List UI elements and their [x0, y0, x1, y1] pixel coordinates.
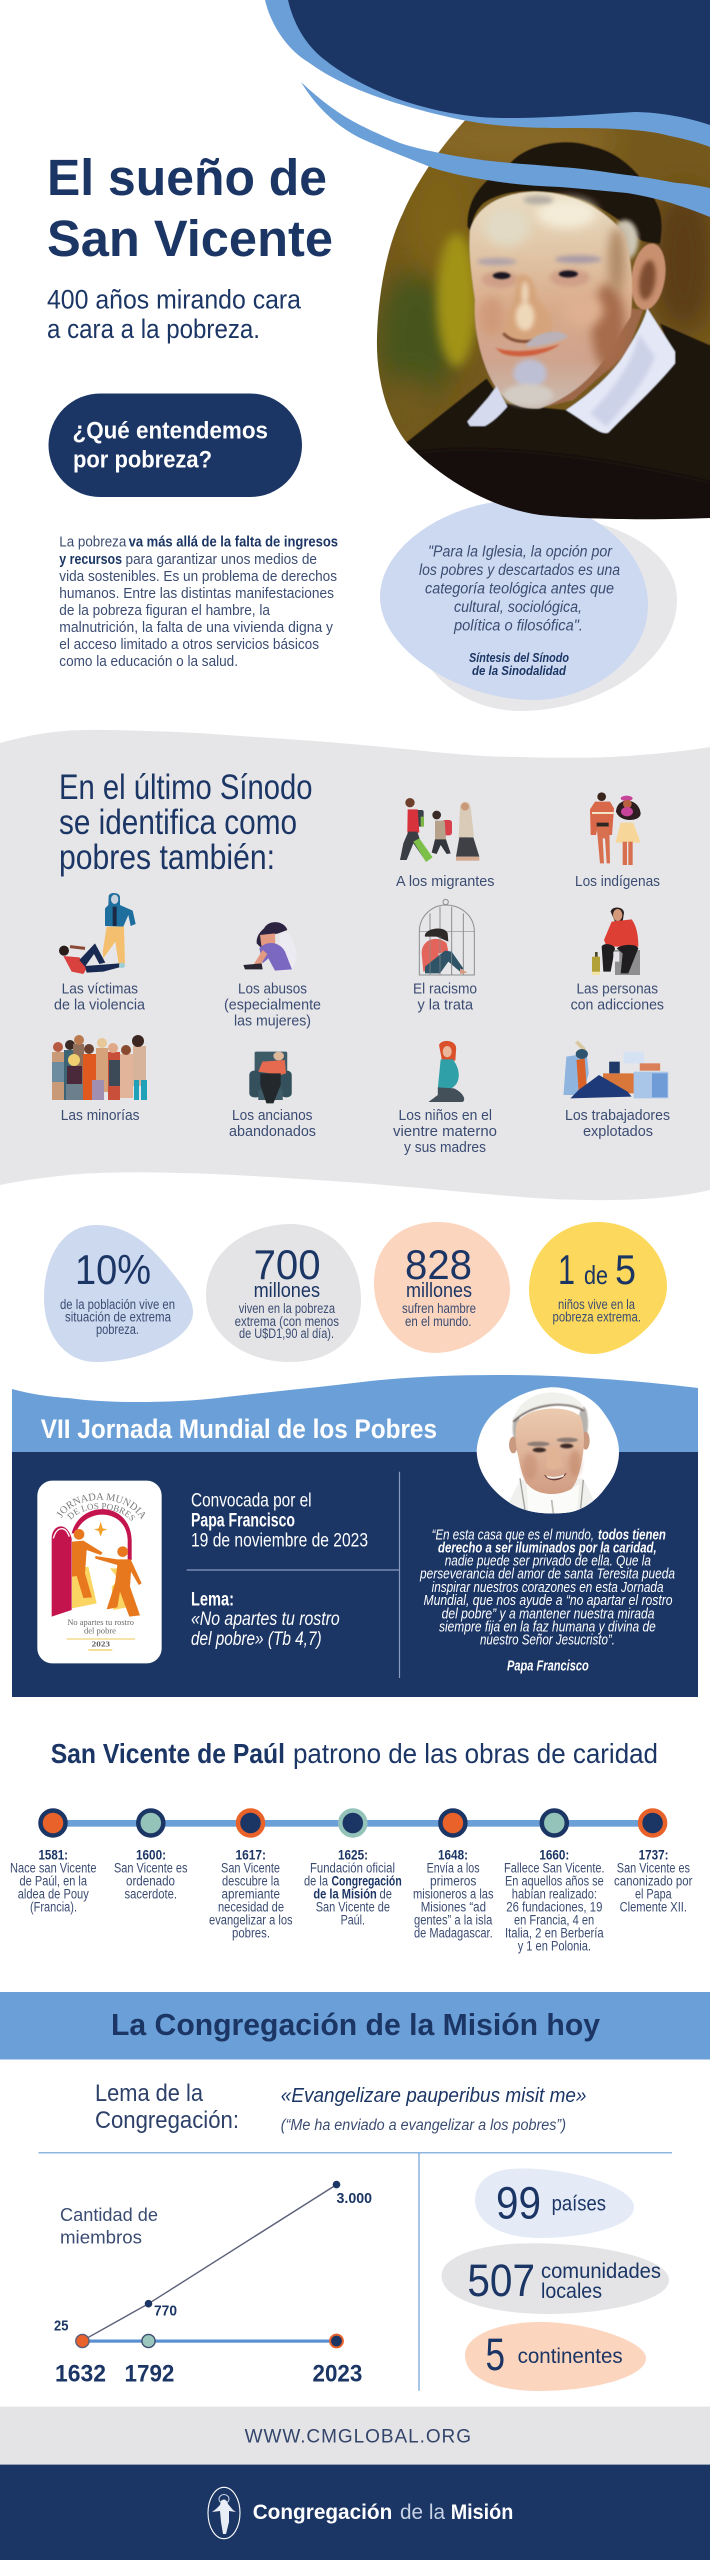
timeline nodes	[40, 1810, 665, 1836]
moustache	[527, 332, 568, 347]
timeline heading	[51, 1738, 658, 1769]
group labels: A los migrantes	[396, 873, 494, 890]
1625 entry: San Vicente de	[316, 1900, 390, 1915]
1737 entry	[614, 1847, 693, 1915]
motto quote	[281, 2085, 586, 2134]
stat: 10%: de la población vive en	[60, 1297, 175, 1312]
group labels: las mujeres)	[234, 1012, 311, 1029]
pill heading	[48, 394, 302, 497]
logo card: 2023	[92, 1640, 110, 1649]
members chart: miembros	[60, 2226, 142, 2247]
pope quote: siempre fija en la faz humana y divina de	[439, 1620, 656, 1636]
quote text	[419, 544, 620, 678]
1581 entry: (Francia).	[30, 1900, 77, 1915]
pope quote: del pobre” y a mantener nuestra mirada	[442, 1606, 654, 1622]
1648 entry: primeros	[430, 1874, 477, 1889]
group labels: y la trata	[418, 996, 474, 1013]
icon: abused woman	[243, 922, 297, 971]
1648 entry: 1648:	[438, 1847, 468, 1862]
1617 entry	[209, 1847, 293, 1941]
group labels: Los abusos	[238, 980, 307, 997]
section heading: pobres también:	[59, 838, 275, 877]
heading band: La Congregación de la Misión hoy	[0, 1992, 710, 2060]
1737 entry: 1737:	[639, 1847, 668, 1862]
icon: violence victims	[59, 893, 136, 974]
1660 entry: 1660:	[539, 1847, 569, 1862]
logo card: No apartes tu rostro	[67, 1618, 134, 1627]
mouth	[495, 344, 560, 356]
1660 entry: 26 fundaciones, 19	[506, 1900, 602, 1915]
motto label: Lema de la	[95, 2080, 204, 2107]
1581 entry	[10, 1847, 96, 1915]
group labels: Los trabajadores	[565, 1107, 670, 1124]
1600 entry: San Vicente es	[114, 1861, 188, 1876]
stat: 828 millones	[374, 1222, 510, 1353]
paragraph on poverty: La pobreza	[59, 533, 127, 550]
website band	[0, 2407, 710, 2465]
1617 entry: evangelizar a los	[209, 1913, 293, 1928]
group labels: con adicciones	[571, 996, 664, 1013]
1581 entry: Nace san Vicente	[10, 1861, 96, 1876]
subtitle: a cara a la pobreza.	[47, 314, 260, 344]
motto quote: (“Me ha enviado a evangelizar a los pobres”)	[281, 2117, 566, 2134]
stat: 1 de 5: 1	[558, 1246, 575, 1293]
stat: 99 países: 99	[496, 2178, 541, 2229]
1660 entry: Italia, 2 en Berbería	[505, 1926, 604, 1941]
1737 entry: San Vicente es	[617, 1861, 690, 1876]
paragraph on poverty: malnutrición, la falta de una vivienda digna y	[59, 619, 333, 636]
icon: person with addiction	[592, 908, 640, 975]
pill heading: ¿Qué entendemos	[72, 418, 268, 444]
logo wordmark: de la	[400, 2501, 445, 2524]
pope quote: “En esta casa que es el mundo,	[432, 1527, 594, 1543]
stat: 5 continentes: continentes	[518, 2345, 623, 2368]
stat: 700 millones: viven en la pobreza	[239, 1301, 335, 1316]
logo wordmark	[253, 2501, 513, 2524]
section heading: se identifica como	[59, 803, 297, 842]
1737 entry: Clemente XII.	[620, 1900, 687, 1915]
group labels: Los niños en el	[398, 1107, 492, 1124]
pope quote: inspirar nuestros corazones en esta Jornada	[432, 1580, 664, 1596]
paragraph on poverty: el acceso limitado a otros servicios básicos	[59, 636, 319, 653]
icon: pregnant woman	[428, 1041, 464, 1102]
group labels: Los indígenas	[575, 873, 660, 890]
paragraph on poverty: y recursos	[59, 551, 122, 568]
convocation text: Papa Francisco	[191, 1511, 295, 1532]
1617 entry: descubre la	[222, 1874, 280, 1889]
group labels: Las minorías	[61, 1107, 140, 1124]
logo card	[37, 1480, 162, 1664]
1581 entry: aldea de Pouy	[18, 1887, 89, 1902]
1600 entry: 1600:	[136, 1847, 166, 1862]
icon: migrants	[400, 798, 479, 862]
eyes and brows	[477, 258, 517, 265]
pope quote	[419, 1527, 675, 1675]
pope quote: nuestro Señor Jesucristo”.	[480, 1633, 615, 1649]
stat: 700 millones	[206, 1224, 361, 1362]
1617 entry: pobres.	[232, 1926, 270, 1941]
icon: indigenous people	[590, 792, 641, 865]
1617 entry: San Vicente	[221, 1861, 280, 1876]
stat: 5 continentes	[465, 2322, 646, 2391]
icon: diverse minorities	[52, 1035, 147, 1100]
group labels: (especialmente	[224, 996, 321, 1013]
panel heading: VII Jornada Mundial de los Pobres	[41, 1414, 437, 1444]
quote text: cultural, sociológica,	[454, 599, 582, 616]
title	[47, 149, 333, 267]
pill heading: por pobreza?	[73, 446, 212, 474]
portrait of San Vicente	[376, 120, 710, 520]
quote text: categoría teológica antes que	[425, 581, 614, 598]
pope quote: nadie puede ser privado de ella. Que la	[445, 1554, 651, 1570]
pope quote: Papa Francisco	[507, 1659, 589, 1675]
icon: elderly person in armchair	[249, 1052, 292, 1103]
group labels	[54, 873, 670, 1156]
1625 entry: Congregación	[332, 1874, 402, 1889]
icon: Miraculous Virgin medal	[208, 2487, 240, 2539]
icon: caged person	[419, 899, 474, 975]
subtitle	[47, 284, 301, 344]
paragraph on poverty: como la educación o la salud.	[59, 653, 238, 670]
panel: VII Jornada Mundial	[12, 1375, 698, 1697]
1617 entry: apremiante	[222, 1887, 280, 1902]
logo wordmark: Congregación	[253, 2501, 392, 2524]
members chart	[54, 2181, 372, 2387]
1617 entry: necesidad de	[218, 1900, 284, 1915]
logo wordmark: Misión	[451, 2501, 513, 2524]
group labels: explotados	[583, 1123, 653, 1140]
title: San Vicente	[47, 210, 333, 267]
1625 entry: de la Misión	[313, 1887, 377, 1902]
1648 entry: misioneros a las	[413, 1887, 494, 1902]
1625 entry: de	[380, 1887, 392, 1902]
paragraph on poverty: para garantizar unos medios de	[126, 551, 317, 568]
1617 entry: 1617:	[236, 1847, 266, 1862]
members chart: 1632	[55, 2360, 106, 2387]
convocation text: «No apartes tu rostro	[191, 1609, 340, 1630]
group labels: y sus madres	[404, 1139, 486, 1156]
1648 entry: Misiones “ad	[421, 1900, 486, 1915]
pope quote: derecho a ser iluminados por la caridad,	[438, 1540, 657, 1556]
convocation text	[191, 1491, 368, 1650]
quote text: los pobres y descartados es una	[419, 562, 620, 579]
convocation text: del pobre» (Tb 4,7)	[191, 1629, 322, 1650]
motto quote: «Evangelizare pauperibus misit me»	[281, 2085, 586, 2107]
stat: 1 de 5: de	[584, 1260, 608, 1290]
stat: 10%: pobreza.	[96, 1322, 139, 1337]
panel: grey band of the poor	[0, 730, 710, 1200]
quote text: de la Sinodalidad	[472, 663, 567, 678]
stat: 828 millones: millones	[406, 1280, 472, 1302]
stat: 1 de 5: niños vive en la	[558, 1297, 635, 1312]
neck	[547, 307, 643, 407]
stat: 5 continentes: 5	[486, 2329, 505, 2380]
coat	[406, 323, 710, 487]
group labels: Los ancianos	[232, 1107, 312, 1124]
1737 entry: canonizado por	[614, 1874, 693, 1889]
paragraph on poverty: vida sostenibles. Es un problema de derechos	[59, 568, 337, 585]
1625 entry: Fundación oficial	[310, 1861, 395, 1876]
heading band: La Congregación de la Misión hoy: La Congregación de la Misión hoy	[111, 2007, 601, 2042]
stat: 1 de 5: pobreza extrema.	[552, 1310, 641, 1325]
members chart: 2023	[312, 2360, 362, 2387]
hair	[612, 220, 638, 260]
paragraph on poverty: humanos. Entre las distintas manifestaciones	[59, 585, 334, 602]
skullcap	[467, 142, 662, 244]
group labels: abandonados	[229, 1123, 316, 1140]
1648 entry: de Madagascar.	[414, 1926, 493, 1941]
members chart: 770	[154, 2304, 177, 2320]
stat: 828 millones: 828	[405, 1241, 472, 1288]
collar	[566, 308, 675, 433]
1660 entry: Fallece San Vicente.	[504, 1861, 605, 1876]
1660 entry: en Francia, 4 en	[514, 1913, 594, 1928]
decorative header waves	[265, 0, 710, 217]
icon: exploited workers	[563, 1042, 668, 1098]
stat: 700 millones: 700	[254, 1241, 321, 1288]
stat: 507 comunidades locales	[442, 2243, 669, 2314]
stat: 507 comunidades locales: comunidades	[541, 2260, 661, 2283]
section dividers	[38, 2153, 672, 2391]
paragraph on poverty: va más allá de la falta de ingresos	[129, 533, 338, 550]
stat: 828 millones: sufren hambre	[402, 1301, 476, 1316]
timeline	[10, 1810, 693, 1954]
timeline heading: patrono de las obras de caridad	[293, 1738, 658, 1769]
quote text: "Para la Iglesia, la opción por	[428, 544, 613, 560]
convocation text: Lema:	[191, 1590, 234, 1611]
title: El sueño de	[47, 149, 327, 206]
group labels: vientre materno	[393, 1123, 497, 1140]
1600 entry: ordenado	[126, 1874, 175, 1889]
paragraph on poverty: de la pobreza figuran el hambre, la	[59, 602, 271, 619]
subtitle: 400 años mirando cara	[47, 284, 301, 314]
stat: 700 millones: de U$D1,90 al día).	[239, 1326, 334, 1341]
1581 entry: 1581:	[38, 1847, 68, 1862]
group labels: Las personas	[576, 980, 658, 997]
1600 entry: sacerdote.	[124, 1887, 177, 1902]
1660 entry	[504, 1847, 605, 1954]
logo card: DE LOS POBRES	[66, 1503, 136, 1520]
1737 entry: el Papa	[635, 1887, 672, 1902]
1625 entry: Paúl.	[341, 1913, 365, 1928]
stat: 700 millones: extrema (con menos	[235, 1314, 339, 1329]
stat: 99 países	[475, 2168, 634, 2238]
stat: 10%	[44, 1225, 193, 1362]
1581 entry: de Paúl, en la	[20, 1874, 87, 1889]
stat: 99 países: países	[552, 2192, 606, 2216]
footer	[0, 2465, 710, 2560]
1600 entry	[114, 1847, 188, 1902]
pope quote: todos tienen	[598, 1527, 666, 1543]
1660 entry: En aquellos años se	[505, 1874, 604, 1889]
paragraph on poverty	[59, 533, 338, 670]
group labels: de la violencia	[54, 996, 146, 1013]
stat: 1 de 5: 5	[615, 1246, 636, 1293]
convocation text: Convocada por el	[191, 1491, 312, 1512]
1625 entry	[304, 1847, 402, 1928]
portrait of Pope Francis	[477, 1387, 619, 1513]
quote blob shadow	[410, 514, 677, 711]
logo card: JORNADA MUNDIAL	[56, 1493, 146, 1520]
members chart: 25	[54, 2319, 68, 2335]
website band: WWW.CMGLOBAL.ORG	[245, 2426, 471, 2448]
stat: 828 millones: en el mundo.	[405, 1314, 472, 1329]
dividers	[187, 1472, 400, 1678]
logo card: del pobre	[84, 1627, 116, 1636]
group labels: El racismo	[413, 980, 477, 997]
1648 entry	[413, 1847, 494, 1941]
stat: 1 de 5	[529, 1222, 667, 1354]
face	[470, 192, 632, 409]
ear	[631, 242, 666, 310]
motto label: Congregación:	[95, 2107, 239, 2134]
stat: 507 comunidades locales: 507	[467, 2255, 535, 2306]
motto label	[95, 2080, 239, 2134]
section heading: En el último Sínodo	[59, 768, 312, 807]
1625 entry: 1625:	[338, 1847, 368, 1862]
1648 entry: Envía a los	[427, 1861, 480, 1876]
stat: 10%: 10%	[75, 1246, 151, 1293]
stat: 507 comunidades locales: locales	[541, 2280, 602, 2303]
group labels: Las víctimas	[62, 980, 138, 997]
quote text: política o filosófica".	[453, 617, 583, 634]
members chart: 1792	[124, 2360, 174, 2387]
members chart: Cantidad de	[60, 2204, 158, 2225]
1660 entry: habían realizado:	[512, 1887, 597, 1902]
stat: 700 millones: millones	[254, 1280, 320, 1302]
1625 entry: de la	[304, 1874, 328, 1889]
nose	[503, 275, 552, 342]
1660 entry: y 1 en Polonia.	[518, 1939, 591, 1954]
section heading	[59, 768, 312, 877]
members chart: 3.000	[336, 2191, 372, 2207]
beard	[513, 359, 547, 387]
1648 entry: gentes” a la isla	[414, 1913, 493, 1928]
quote blob	[380, 500, 648, 700]
convocation text: 19 de noviembre de 2023	[191, 1531, 368, 1552]
stat: 10%: situación de extrema	[65, 1310, 171, 1325]
timeline heading: San Vicente de Paúl	[51, 1738, 285, 1769]
quote text: Síntesis del Sínodo	[469, 650, 569, 665]
